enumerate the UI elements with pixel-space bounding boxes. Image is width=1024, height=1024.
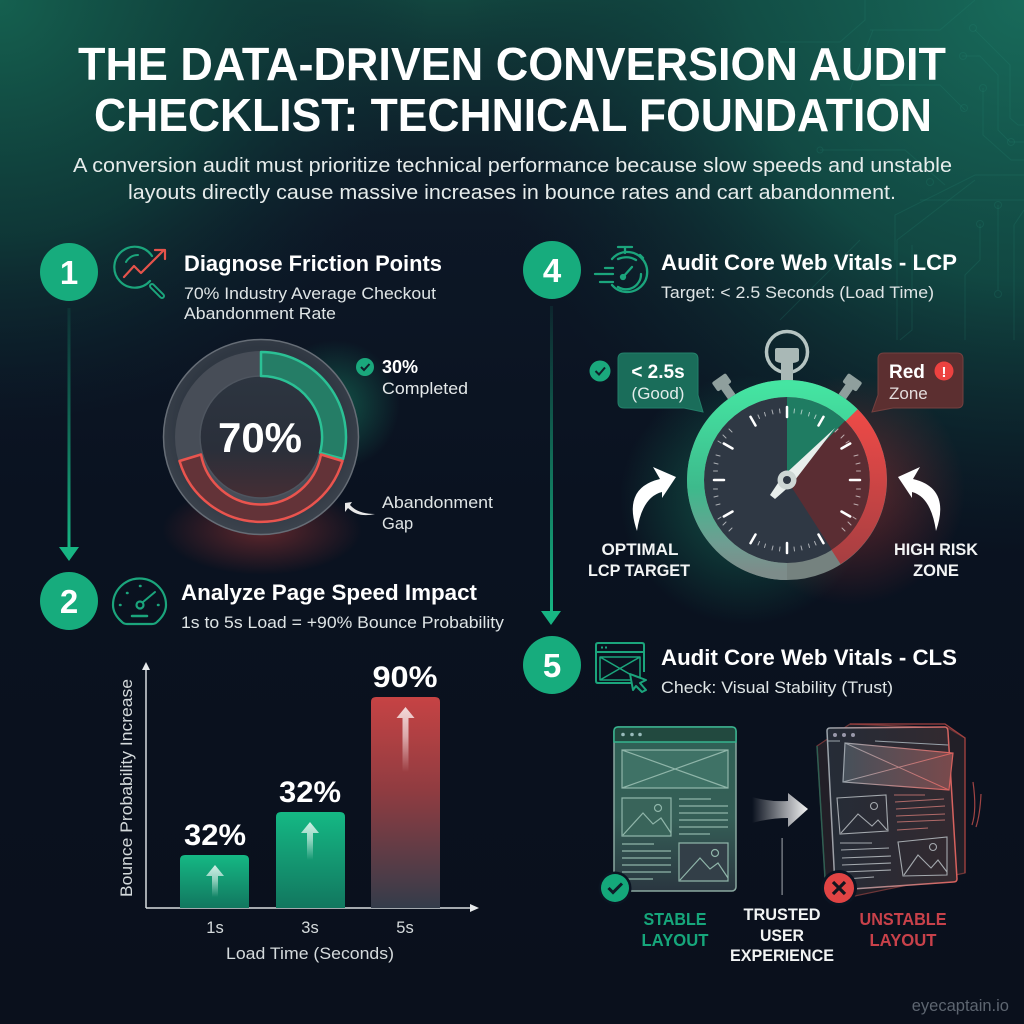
- step 5 badge: 5: [543, 647, 561, 684]
- step 2 badge: 2: [60, 583, 78, 620]
- callout: abandonment gap: Abandonment: [382, 494, 493, 512]
- callout: red zone: [872, 353, 963, 412]
- label: trusted user experience: [730, 905, 834, 965]
- label: stable layout: STABLE: [644, 909, 706, 929]
- title: THE DATA-DRIVEN CONVERSION AUDIT: [78, 38, 946, 90]
- bar: 3s: 3s: [301, 919, 319, 937]
- label: high risk zone: ZONE: [913, 562, 959, 580]
- check badge: [598, 872, 632, 904]
- callout: good under 2.5s: (Good): [632, 384, 684, 403]
- segment: abandonment gap: [180, 454, 342, 522]
- label: optimal LCP target: OPTIMAL: [602, 541, 678, 559]
- arrow: step 4 to step 5: [541, 306, 561, 625]
- text: LCP target: Target: < 2.5 Seconds (Load Time): [661, 284, 934, 302]
- stopwatch: [620, 332, 965, 625]
- arrow: stable to unstable: [752, 793, 808, 827]
- text: visual stability: Check: Visual Stability (Trust): [661, 679, 893, 697]
- bar: 5s: 90%: [372, 661, 438, 694]
- callout: abandonment gap: Gap: [382, 515, 413, 533]
- title: CHECKLIST: TECHNICAL FOUNDATION: [94, 89, 932, 141]
- label: stable layout: [642, 909, 709, 950]
- dial: [701, 394, 873, 566]
- callout: 30% completed: [356, 357, 468, 398]
- bar: 5s: 5s: [396, 919, 414, 937]
- label: high risk zone: HIGH RISK: [894, 541, 978, 559]
- callout: red zone: Zone: [889, 384, 928, 403]
- label: unstable layout: UNSTABLE: [860, 909, 946, 929]
- text: checkout abandonment rate: [184, 285, 436, 323]
- title: [78, 38, 946, 141]
- label: unstable layout: LAYOUT: [870, 930, 937, 950]
- label: trusted user experience: USER: [760, 926, 804, 945]
- watermark: eyecaptain.io: [912, 997, 1009, 1015]
- callout: good under 2.5s: < 2.5s: [631, 362, 685, 383]
- arrow: optimal LCP target: [633, 467, 676, 531]
- divider line: [782, 838, 783, 895]
- label: optimal LCP target: [588, 541, 690, 580]
- label: stable layout: LAYOUT: [642, 930, 709, 950]
- step 4 badge: 4: [543, 252, 562, 289]
- unstable layout wireframe: [817, 724, 981, 906]
- step 1 badge: [40, 243, 98, 301]
- icon: stopwatch with speed lines: [595, 247, 647, 292]
- callout: red zone: !: [942, 364, 946, 381]
- segment: 30% completed: [261, 352, 346, 459]
- text: checkout abandonment rate: Abandonment Rate: [184, 305, 336, 323]
- subtitle: A conversion audit must prioritize technical performance because slow speeds and unstable: [73, 155, 952, 177]
- axes: [146, 670, 472, 908]
- tick marks: [714, 407, 860, 553]
- heading: audit CLS: Audit Core Web Vitals - CLS: [661, 645, 957, 670]
- text: checkout abandonment rate: 70% Industry Average Checkout: [184, 285, 436, 303]
- stable layout wireframe: [598, 727, 736, 904]
- subtitle: [73, 155, 952, 204]
- crown ring: [766, 332, 808, 372]
- text: bounce probability: 1s to 5s Load = +90% Bounce Probability: [181, 614, 505, 632]
- axis title: load time: Load Time (Seconds): [226, 945, 394, 963]
- ring: red zone: [836, 415, 878, 557]
- callout: 30% completed: 30%: [382, 357, 418, 377]
- step 1 badge: 1: [60, 254, 78, 291]
- heading: audit LCP: Audit Core Web Vitals - LCP: [661, 250, 957, 275]
- arrow: high risk zone: [898, 467, 940, 531]
- arrow: step 1 to step 2: [59, 308, 79, 561]
- ring: grey lower track: [696, 388, 878, 572]
- bar: 3s: 32%: [279, 776, 341, 809]
- ring: green zone: [695, 388, 852, 572]
- step 5 badge: [523, 636, 581, 694]
- icon: magnifier with trend line: [114, 247, 165, 296]
- heading: analyze page speed impact: Analyze Page Speed Impact: [181, 580, 478, 605]
- side buttons: [712, 373, 862, 402]
- bar: 3s: [276, 776, 345, 937]
- step 2 badge: [40, 572, 98, 630]
- callout: abandonment gap: [345, 494, 493, 533]
- icon: browser with cursor: [596, 643, 646, 692]
- step 4 badge: [523, 241, 581, 299]
- callout: good under 2.5s: [590, 353, 703, 412]
- label: high risk zone: [894, 541, 978, 580]
- hand: [770, 428, 835, 499]
- bar: 1s: [180, 819, 249, 937]
- axis title: bounce probability increase: Bounce Probability Increase: [118, 679, 136, 897]
- bar: 1s: 1s: [206, 919, 224, 937]
- callout: 30% completed: Completed: [382, 380, 468, 398]
- callout: red zone: Red: [889, 362, 925, 383]
- icon: speed gauge: [113, 578, 166, 624]
- label: unstable layout: [860, 909, 946, 950]
- cross badge: [821, 870, 857, 906]
- label: optimal LCP target: LCP TARGET: [588, 562, 690, 580]
- bar: 5s: [371, 661, 440, 937]
- label: trusted user experience: TRUSTED: [744, 905, 820, 924]
- donut chart: [162, 340, 400, 575]
- bar: 1s: 32%: [184, 819, 246, 852]
- label: trusted user experience: EXPERIENCE: [730, 946, 834, 965]
- bar chart: [118, 661, 479, 963]
- heading: diagnose friction points: Diagnose Friction Points: [184, 251, 442, 276]
- donut value: 70%: [218, 414, 302, 461]
- subtitle: layouts directly cause massive increases in bounce rates and cart abandonment.: [128, 182, 896, 204]
